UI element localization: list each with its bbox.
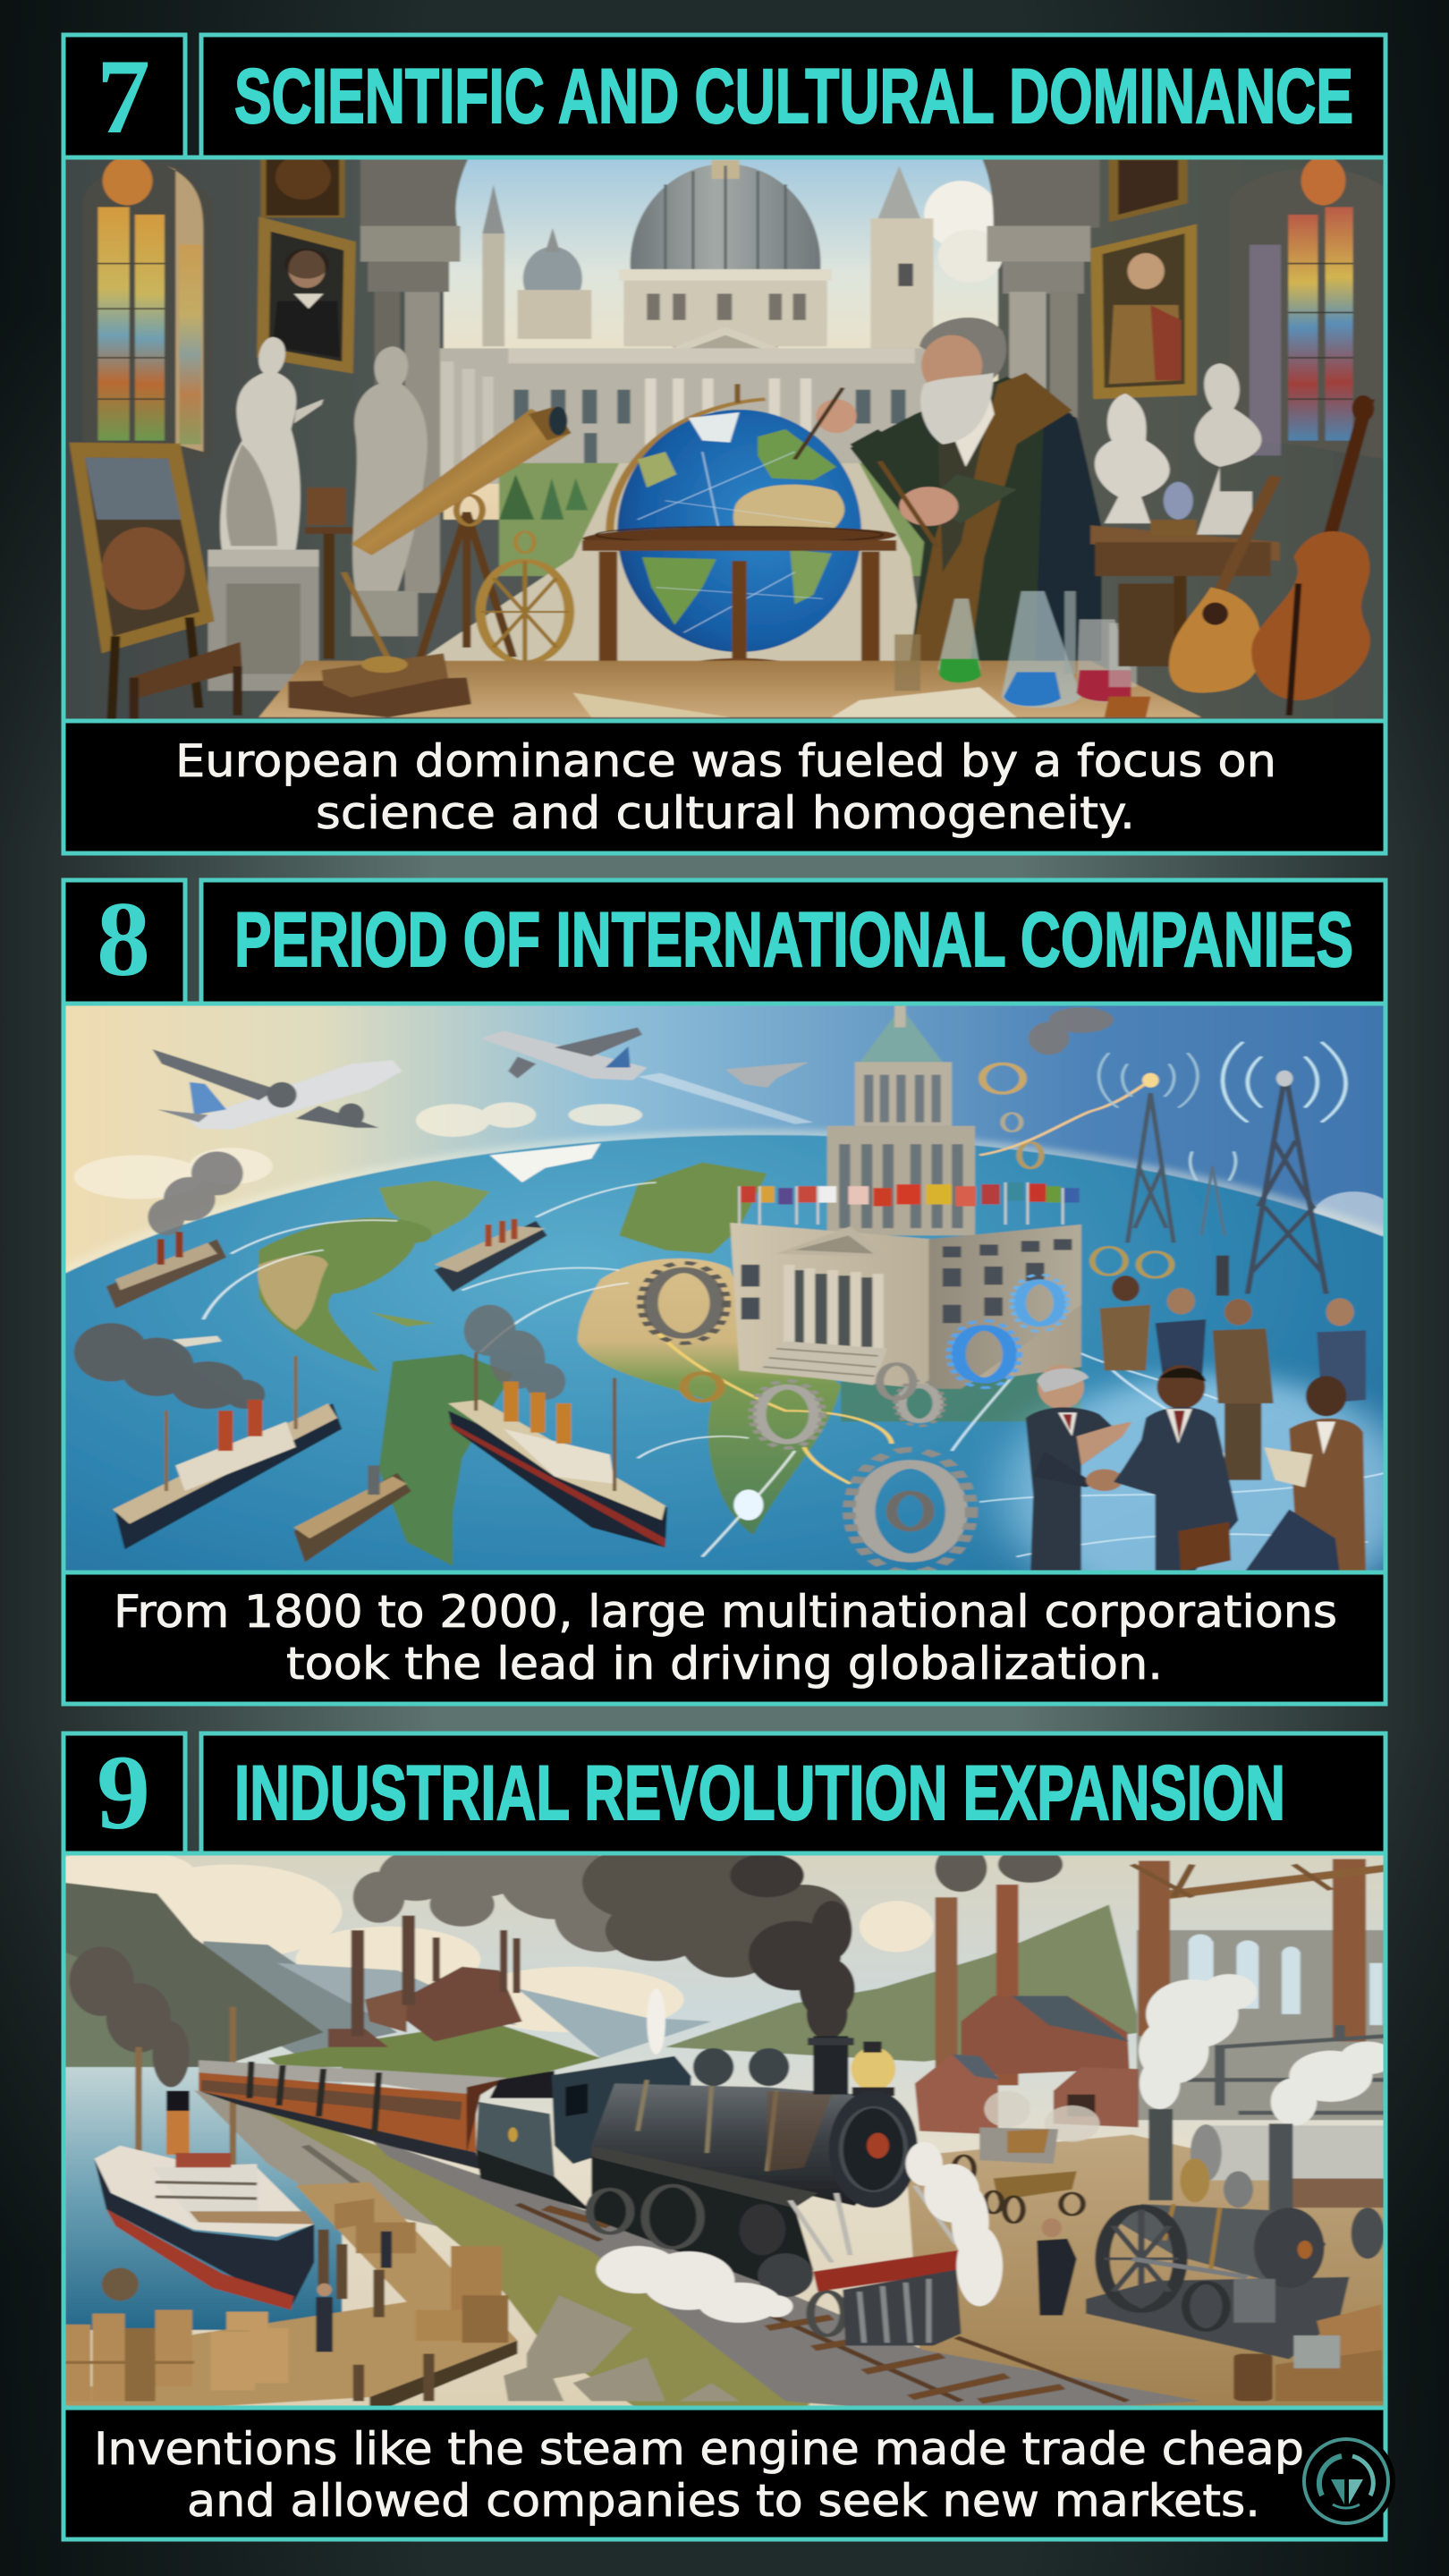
arches and pillars — [360, 159, 469, 227]
flags — [740, 1182, 1080, 1224]
businesspeople background — [1216, 1256, 1229, 1296]
guitar and cello — [1220, 476, 1275, 591]
caption: steam engine — [64, 2408, 1385, 2539]
caption: european dominance — [64, 721, 1385, 853]
left window — [84, 179, 140, 442]
framed paintings — [259, 159, 345, 218]
continents — [490, 1143, 601, 1182]
machinery pipes — [1188, 2025, 1386, 2113]
telescope — [420, 512, 513, 657]
illustration: steam locomotive, ship, factories and steam engine — [0, 1839, 1449, 2415]
small boat — [102, 2268, 139, 2301]
image frame — [64, 157, 1385, 721]
passenger train — [199, 2060, 508, 2169]
smoke — [353, 1839, 647, 1952]
busts and side table — [1090, 525, 1280, 561]
heading bar: industrial revolution expansion — [201, 1733, 1385, 1855]
illustration: scholar with globe in a european gallery — [66, 159, 1383, 719]
panel: scientific and cultural dominance — [0, 35, 1449, 853]
caption: european dominance: science and cultural homogeneity. — [316, 787, 1135, 839]
armillary wheel — [480, 561, 569, 663]
worker — [1037, 2218, 1077, 2316]
ships and smoke — [148, 1151, 243, 1235]
locomotive — [552, 2056, 691, 2164]
flasks — [938, 598, 980, 679]
tender — [476, 2102, 555, 2177]
lower ground: grey rock, grass and gravel — [194, 2090, 480, 2236]
easel painting — [69, 443, 215, 653]
caption: steam engine: Inventions like the steam engine made trade cheap — [94, 2423, 1304, 2475]
heading bar: scientific and cultural dominance — [201, 35, 1385, 158]
number badge 9: 9 — [97, 1733, 150, 1852]
gears — [641, 1063, 1172, 1572]
caption: multinational corporations: took the lead in driving globalization. — [286, 1638, 1163, 1690]
dock, crates and workers — [64, 2182, 518, 2415]
number badge 7 — [64, 35, 185, 158]
caption: steam engine: and allowed companies to seek new markets. — [187, 2475, 1260, 2527]
image frame — [64, 1853, 1385, 2408]
route lines — [203, 1182, 795, 1556]
sea — [64, 2067, 342, 2330]
radio towers — [1099, 1042, 1346, 1294]
heading bar: period of international companies — [201, 880, 1385, 1004]
caption: european dominance: European dominance was fueled by a focus on — [175, 735, 1276, 787]
white steam — [596, 2142, 1003, 2323]
statues — [208, 550, 318, 569]
stationary steam engine — [1086, 2109, 1349, 2360]
number badge 8 — [64, 879, 185, 1004]
tower and headquarters — [860, 1014, 943, 1063]
illustration: ships, planes, corporate tower and handshake on a globe — [66, 1005, 1383, 1571]
books and table — [258, 661, 1201, 717]
handshake foreground — [1026, 1365, 1366, 1574]
crates and barrel — [1233, 2353, 1273, 2402]
right side brickwork — [906, 2135, 1449, 2415]
ship — [94, 2007, 314, 2309]
glow under business group — [972, 1361, 1383, 1571]
panel: industrial revolution expansion — [0, 1733, 1449, 2539]
caption: multinational corporations — [64, 1572, 1385, 1704]
hill factory — [268, 2021, 601, 2080]
right window — [1286, 170, 1383, 458]
cart — [953, 2127, 1083, 2223]
icon: circular logo badge — [1299, 2433, 1395, 2529]
steam columns — [1139, 1974, 1395, 2125]
image frame — [64, 1004, 1385, 1572]
scholar — [850, 377, 1073, 661]
number badge 7: 7 — [97, 37, 150, 156]
number badge 9 — [64, 1733, 185, 1855]
number badge 8: 8 — [97, 879, 150, 998]
planes — [190, 1060, 402, 1130]
mountains — [203, 1941, 397, 2055]
globe — [610, 399, 765, 531]
caption: multinational corporations: From 1800 to 2000, large multinational corporations — [114, 1586, 1337, 1638]
panel: period of international companies — [61, 878, 1388, 1707]
